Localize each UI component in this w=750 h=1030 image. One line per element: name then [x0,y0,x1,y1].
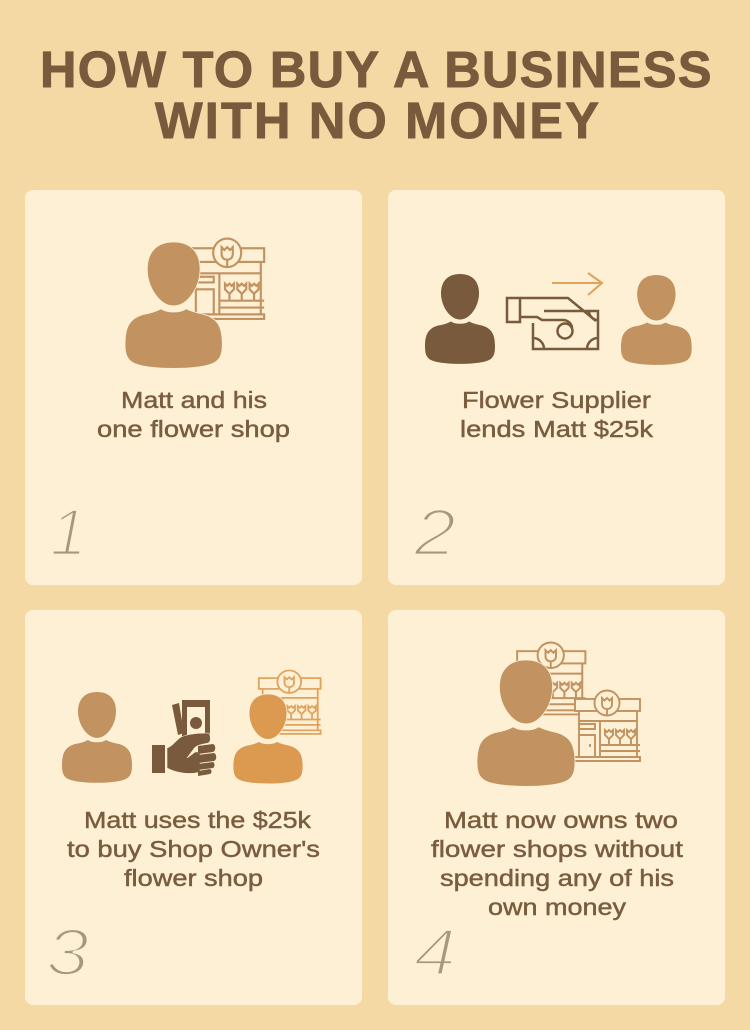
caption [97,387,290,442]
panel: step 3 [25,610,362,1005]
icon: hand holding cash [152,700,216,776]
icon: Matt [125,242,222,368]
caption: to buy Shop Owner's [67,836,320,862]
title: HOW TO BUY A BUSINESS [40,41,712,98]
icon: second flower shop [574,690,640,761]
caption [460,387,654,442]
icon: flower shop [258,670,321,734]
icon: Matt [62,692,132,783]
icon: Matt [477,660,575,786]
caption: own money [488,894,627,920]
caption: flower shop [124,865,263,891]
icon: hand with cash [507,298,598,349]
number 2: 2 [413,495,456,569]
caption: Matt now owns two [444,807,678,833]
caption: one flower shop [97,416,290,442]
icon: first flower shop [516,643,585,714]
icon: shop owner [233,694,303,784]
panel: step 2 [388,190,725,585]
panel: step 1 [25,190,362,585]
panel: step 4 [388,610,725,1005]
number 4: 4 [414,915,456,989]
caption: Flower Supplier [462,387,651,413]
caption [431,807,684,920]
caption: Matt and his [121,387,267,413]
icon: arrow [552,273,602,295]
caption: spending any of his [440,865,674,891]
title: WITH NO MONEY [155,92,599,149]
title [40,41,712,149]
caption: Matt uses the $25k [84,807,312,833]
number 3: 3 [46,915,89,989]
caption: lends Matt $25k [460,416,654,442]
icon: flower shop [190,239,264,319]
caption: flower shops without [431,836,684,862]
caption [67,807,320,891]
icon: Matt [621,275,692,365]
icon: flower supplier [425,274,495,364]
number 1: 1 [50,495,87,569]
